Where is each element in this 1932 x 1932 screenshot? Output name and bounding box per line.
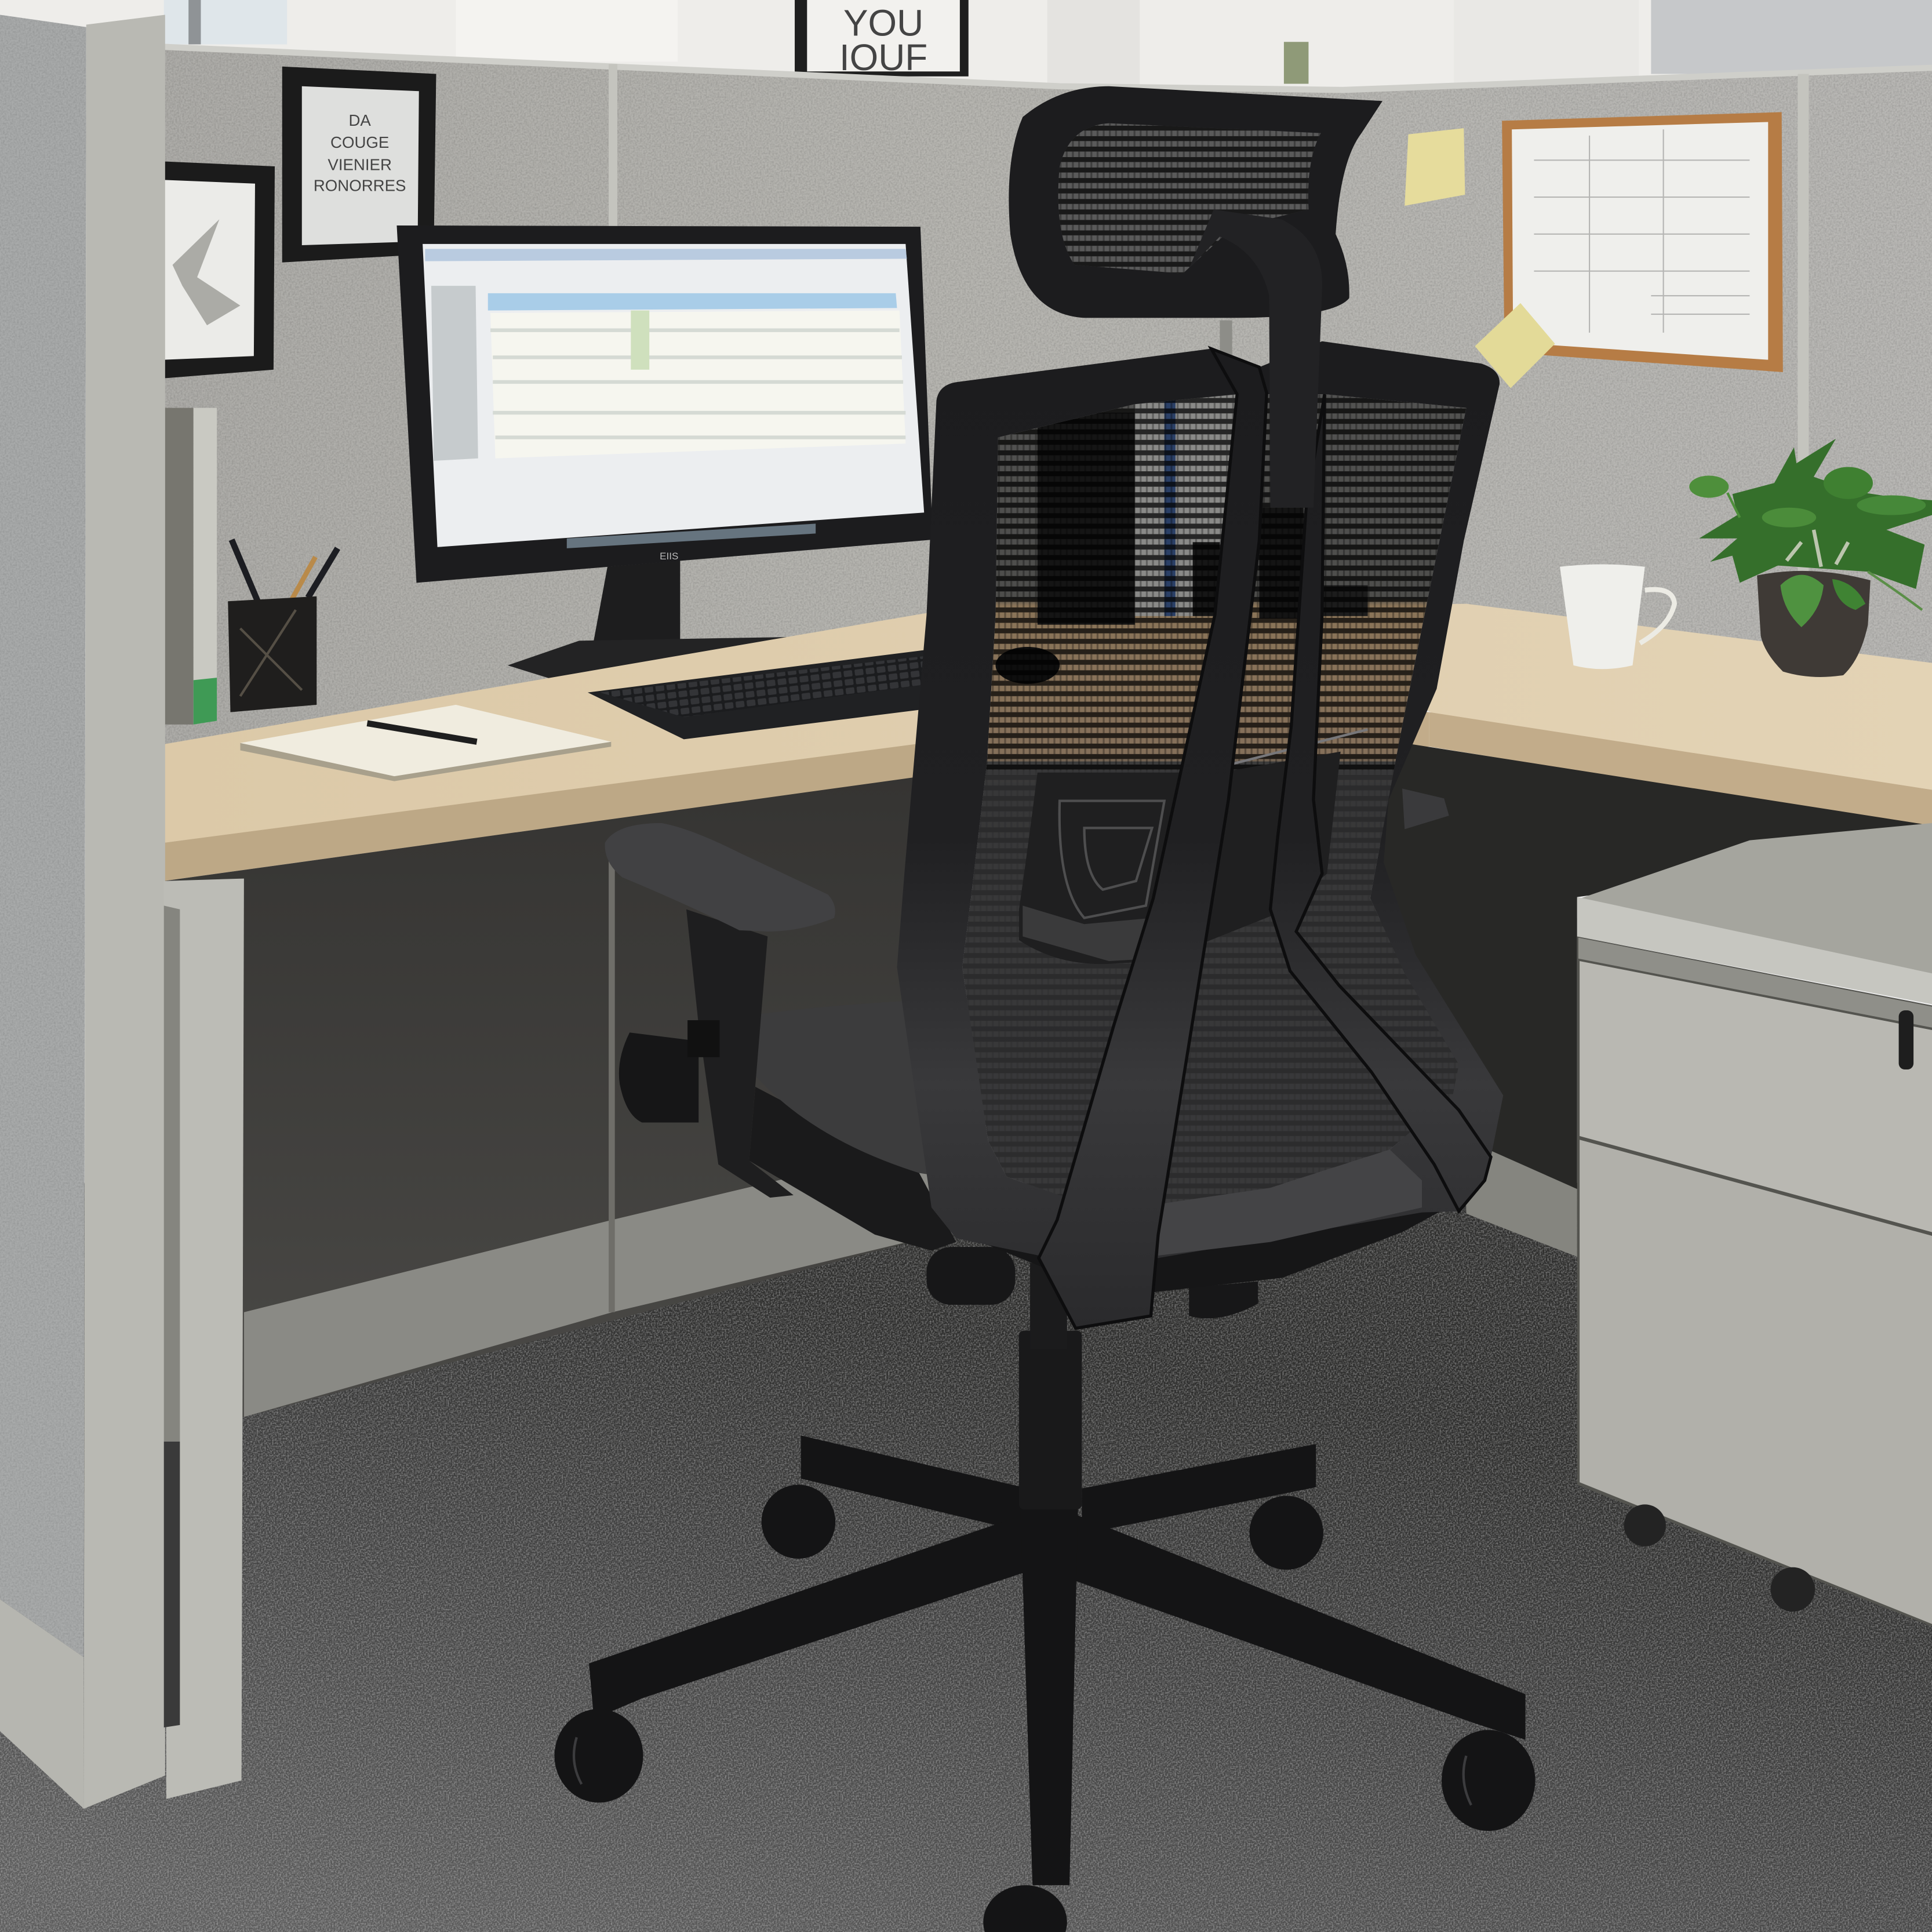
framed print upper: RONORRES — [314, 176, 406, 194]
framed print upper: DA — [348, 111, 371, 129]
mesh weave lines — [949, 382, 1479, 1220]
back frame — [897, 341, 1503, 1258]
under-desk panels — [164, 739, 1932, 1442]
metal pedestal drawer — [1577, 823, 1932, 1627]
chair casters — [555, 1485, 1536, 1932]
office chair — [555, 86, 1536, 1932]
background poster: YOU — [843, 2, 923, 44]
background poster — [795, 0, 969, 78]
view through mesh: monitor and cabinet — [949, 394, 1479, 776]
desk leg — [164, 879, 244, 1799]
lumbar support — [1019, 729, 1367, 964]
open notebook — [240, 705, 611, 781]
seat underside and mechanism — [926, 1201, 1459, 1319]
framed print upper: COUGE — [330, 133, 389, 151]
headrest support post — [1189, 209, 1322, 508]
headrest — [1009, 86, 1382, 318]
chair five-star base — [589, 1263, 1526, 1885]
coffee mug — [1560, 565, 1675, 669]
left armrest — [605, 823, 835, 1198]
sticky note tilted — [1475, 303, 1555, 388]
diagonal frame strut — [1039, 349, 1267, 1328]
background poster: IOUF — [839, 37, 927, 78]
background office wall and windows — [0, 0, 1932, 99]
cork notice board — [1502, 112, 1783, 372]
sticky note — [1405, 128, 1465, 206]
books — [164, 408, 217, 725]
cubicle partition wall — [164, 37, 1932, 776]
framed print lower — [164, 161, 275, 379]
computer monitor: EIIS — [660, 551, 678, 562]
seat rim — [1158, 1149, 1422, 1256]
right frame strut — [1271, 394, 1491, 1211]
mesh back — [949, 382, 1479, 1220]
keyboard — [588, 649, 930, 739]
desk surface — [164, 604, 1932, 881]
floor carpet — [0, 1183, 1932, 1932]
potted plant — [1689, 439, 1932, 677]
framed print upper — [282, 67, 436, 263]
right armrest pad — [1402, 788, 1449, 829]
lower mesh softening — [949, 770, 1479, 1220]
pen holder — [228, 540, 337, 712]
computer monitor — [396, 225, 933, 687]
near partition panel — [0, 12, 165, 1809]
view through mesh: dark block — [1038, 413, 1135, 625]
seat cushion — [749, 999, 986, 1251]
framed print upper: VIENIER — [328, 155, 392, 173]
